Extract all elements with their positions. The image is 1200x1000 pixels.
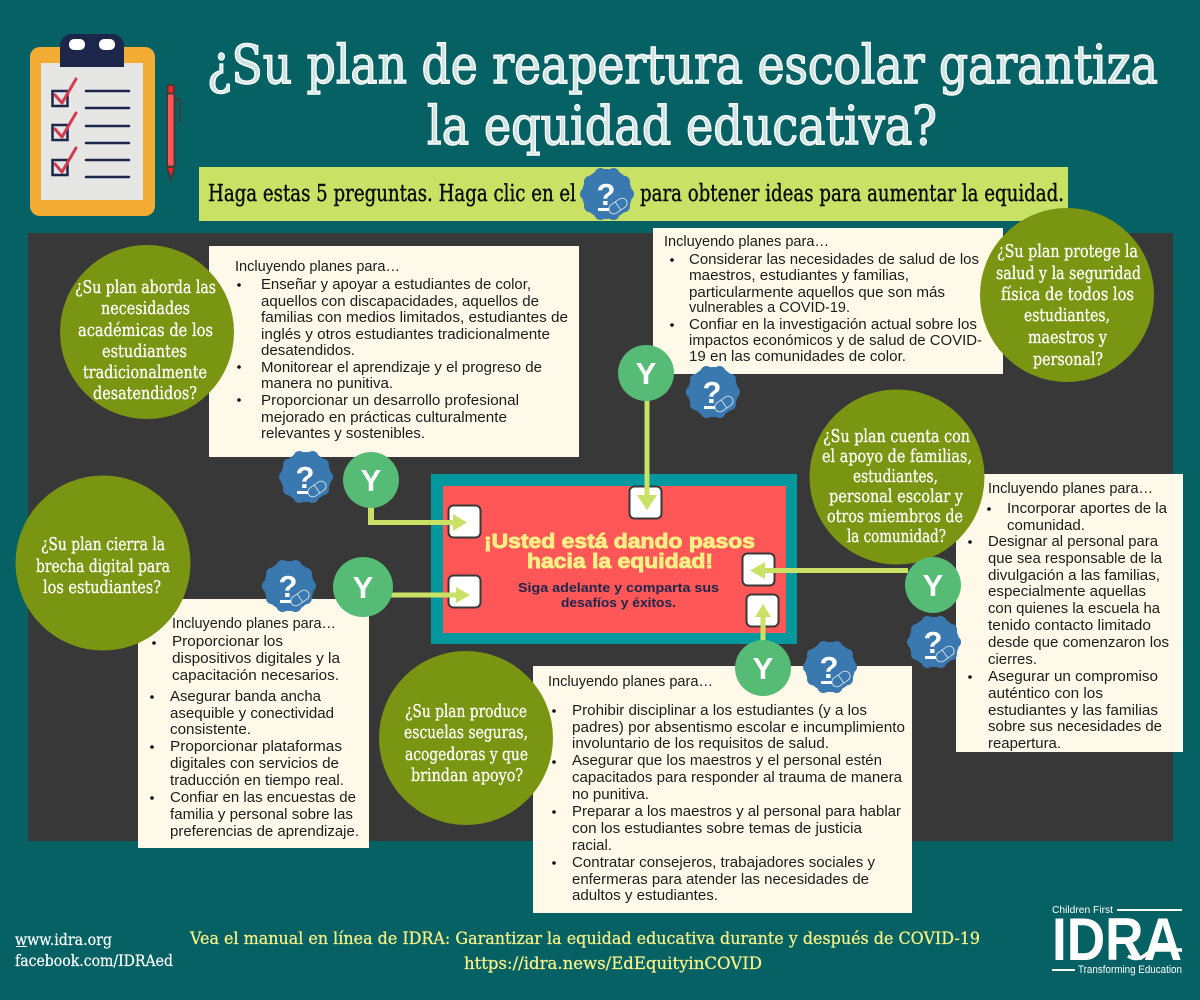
Y marker: community support	[905, 557, 961, 613]
footer links	[15, 931, 173, 970]
bullet: digital devices: dispositivos digitales y la	[172, 651, 341, 667]
badge: health and safety ideas	[686, 366, 740, 418]
badge: digital divide ideas	[262, 560, 316, 612]
bullet: authentic commitment: sobre sus necesidades de	[988, 719, 1162, 735]
Y marker: digital divide	[333, 557, 393, 617]
IDRA logo: Transforming Education	[1078, 964, 1182, 976]
bullet: current research: Confiar en la investigación actual sobre los	[689, 317, 977, 333]
bullet: current research: impactos económicos y de salud de COVID-	[689, 333, 982, 349]
bullet: surveys: familia y personal sobre las	[170, 807, 353, 823]
instruction banner: Haga estas 5 preguntas. Haga clic en el	[208, 181, 576, 207]
badge: safe schools ideas	[803, 641, 857, 693]
central equity box: desafíos y éxitos.	[561, 595, 676, 610]
bullet: health needs	[670, 252, 979, 316]
question circle: digital divide	[16, 476, 190, 650]
bullet: authentic commitment: estudiantes y las familias	[988, 703, 1158, 719]
bullet: broadband: asequible y conectividad	[170, 706, 334, 722]
question circle: community support: la comunidad?	[847, 526, 946, 547]
Y marker: academic needs: Y	[361, 463, 382, 498]
question circle: community support: personal escolar y	[829, 486, 964, 507]
central equity box: hacia la equidad!	[527, 551, 713, 573]
bullet: prohibit discipline: involuntario de los requisitos de salud.	[572, 736, 829, 752]
Y marker: safe schools	[735, 640, 791, 696]
dark background panel	[28, 233, 1173, 841]
bullet: surveys: Confiar en las encuestas de	[170, 790, 356, 806]
Y marker: community support: Y	[923, 568, 944, 603]
bullet: health needs: vulnerables a COVID-19.	[689, 300, 850, 316]
bullet: professional development: relevantes y sostenibles.	[261, 426, 425, 442]
bullet: health needs: Considerar las necesidades de salud de los	[689, 252, 979, 268]
bullet: outreach staff: que sea responsable de la	[988, 551, 1163, 567]
bullet: outreach staff: cierres.	[988, 652, 1037, 668]
bullet: broadband	[150, 689, 334, 738]
arrow: health and safety to center	[637, 395, 657, 510]
bullet: digital platforms	[150, 739, 344, 789]
bullet: surveys: preferencias de aprendizaje.	[170, 824, 359, 840]
bullet: outreach staff: con quienes la escuela ha	[988, 601, 1161, 617]
bullet: support students: inglés y otros estudiantes tradicionalmente	[261, 327, 550, 343]
question circle: community support: otros miembros de	[827, 506, 963, 527]
panel: health and safety plans: Incluyendo planes para…	[664, 234, 829, 250]
instruction banner: ?	[597, 177, 615, 212]
question circle: digital divide: brecha digital para	[36, 556, 170, 577]
central equity box	[431, 474, 797, 644]
Y marker: academic needs	[343, 452, 399, 508]
question circle: academic needs: académicas de los	[78, 320, 213, 341]
badge: academic needs ideas	[279, 451, 333, 503]
question circle: community support: estudiantes,	[853, 466, 938, 487]
bullet: racial justice: con los estudiantes sobre temas de justicia	[572, 821, 863, 837]
question circle: community support: el apoyo de familias,	[822, 446, 972, 467]
bullet: health needs: particularmente aquellos que son más	[689, 285, 945, 301]
bullet: racial justice: Preparar a los maestros y al personal para hablar	[572, 804, 901, 820]
bullet: community input: Incorporar aportes de la	[1007, 501, 1168, 517]
bullet: racial justice: racial.	[572, 838, 612, 854]
checkboxes in central box	[448, 486, 778, 626]
bullet: outreach staff: tenido contacto limitado	[988, 618, 1151, 634]
question circle: academic needs: tradicionalmente	[83, 362, 207, 383]
bullet: professional development: Proporcionar un desarrollo profesional	[261, 393, 519, 409]
question circle: health and safety	[980, 208, 1154, 382]
footer manual reference: https://idra.news/EdEquityinCOVID	[464, 954, 762, 974]
question circle: academic needs: estudiantes	[102, 341, 187, 362]
Y marker: health and safety: Y	[636, 356, 657, 391]
panel: academic needs plans: Incluyendo planes para…	[235, 259, 400, 275]
bullet: hire counselors: enfermeras para atender las necesidades de	[572, 872, 869, 888]
central equity box: Siga adelante y comparta sus	[518, 580, 719, 595]
panel: digital divide plans: Incluyendo planes para…	[172, 616, 336, 632]
bullet: professional development: mejorado en prácticas culturalmente	[261, 410, 507, 426]
footer links: www.idra.org	[15, 931, 112, 949]
bullet: authentic commitment: reapertura.	[988, 736, 1061, 752]
icon: pen	[166, 85, 180, 183]
bullet: health needs: maestros, estudiantes y familias,	[689, 268, 909, 284]
bullet: hire counselors: adultos y estudiantes.	[572, 888, 718, 904]
bullet: prohibit discipline: padres) por absentismo escolar e incumplimiento	[572, 720, 905, 736]
bullet: support students: desatendidos.	[261, 343, 355, 359]
arrow: academic needs to center	[368, 500, 467, 531]
badge: academic needs ideas: ?	[296, 460, 314, 495]
arrow: digital divide to center	[385, 587, 470, 603]
instruction banner	[199, 167, 1068, 221]
question circle: academic needs: desatendidos?	[93, 383, 197, 404]
bullet: racial justice	[552, 804, 901, 854]
bullet: digital devices: Proporcionar los	[172, 634, 283, 650]
bullet: digital devices: capacitación necesarios.	[172, 668, 339, 684]
badge: digital divide ideas: ?	[279, 569, 297, 604]
question circle: health and safety: estudiantes,	[1024, 305, 1110, 326]
bullet: digital devices	[152, 634, 341, 684]
bullet: monitor learning	[237, 360, 542, 392]
arrow: safe schools to center	[755, 604, 771, 645]
title: la equidad educativa?	[427, 96, 937, 157]
footer links: facebook.com/IDRAed	[15, 952, 173, 970]
bullet: trauma training: capacitados para responder al trauma de manera	[572, 770, 903, 786]
question circle: community support: ¿Su plan cuenta con	[823, 426, 970, 447]
bullet: digital platforms: Proporcionar plataformas	[170, 739, 342, 755]
question circle: digital divide: los estudiantes?	[43, 577, 161, 598]
instruction banner: para obtener ideas para aumentar la equidad.	[640, 181, 1064, 207]
bullet: support students: familias con medios limitados, estudiantes de	[261, 310, 568, 326]
footer manual reference: Vea el manual en línea de IDRA: Garantizar la equidad educativa durante y después de COVID-19	[189, 929, 980, 949]
bullet: monitor learning: manera no punitiva.	[261, 376, 393, 392]
question circle: safe schools: acogedoras y que	[405, 744, 528, 765]
arrow: community support to center	[750, 562, 908, 579]
question circle: community support	[810, 390, 984, 564]
bullet: broadband: Asegurar banda ancha	[170, 689, 322, 705]
bullet: trauma training: Asegurar que los maestros y el personal estén	[572, 753, 882, 769]
bullet: outreach staff: divulgación a las familias,	[988, 568, 1160, 584]
bullet: surveys	[150, 790, 359, 840]
bullet: prohibit discipline	[552, 703, 905, 752]
bullet: support students: aquellos con discapacidades, aquellos de	[261, 294, 539, 310]
badge: community support ideas: ?	[924, 625, 942, 660]
Y marker: digital divide: Y	[353, 570, 374, 605]
bullet: support students: Enseñar y apoyar a estudiantes de color,	[261, 277, 531, 293]
bullet: hire counselors: Contratar consejeros, trabajadores sociales y	[572, 855, 876, 871]
bullet: current research: 19 en las comunidades de color.	[689, 349, 906, 365]
bullet: authentic commitment: Asegurar un compromiso	[988, 669, 1158, 685]
panel: community support plans: Incluyendo planes para…	[988, 481, 1153, 497]
panel: community support plans	[956, 474, 1183, 752]
question circle: health and safety: física de todos los	[1001, 284, 1134, 305]
bullet: trauma training	[552, 753, 903, 803]
question circle: health and safety: maestros y	[1028, 327, 1108, 348]
bullet: outreach staff: Designar al personal para	[988, 534, 1159, 550]
badge: safe schools ideas: ?	[820, 650, 838, 685]
central equity box: ¡Usted está dando pasos	[484, 531, 755, 553]
bullet: support students	[237, 277, 568, 359]
footer manual reference	[189, 929, 980, 974]
bullet: outreach staff: especialmente aquellas	[988, 584, 1146, 600]
bullet: authentic commitment	[968, 669, 1162, 752]
IDRA logo: IDRA	[1052, 906, 1182, 973]
bullet: outreach staff: desde que comenzaron los	[988, 635, 1169, 651]
panel: safe schools plans: Incluyendo planes para…	[548, 674, 713, 690]
icon: clipboard checklist	[30, 34, 155, 216]
IDRA logo: Children First	[1052, 904, 1113, 916]
bullet: digital platforms: traducción en tiempo real.	[170, 773, 344, 789]
bullet: prohibit discipline: Prohibir disciplinar a los estudiantes (y a los	[572, 703, 867, 719]
bullet: community input: comunidad.	[1007, 518, 1085, 534]
question circle: health and safety: salud y la seguridad	[996, 263, 1141, 284]
bullet: professional development	[237, 393, 519, 442]
panel: health and safety plans	[653, 228, 1003, 374]
panel: academic needs plans	[209, 246, 579, 457]
bullet: community input	[987, 501, 1168, 534]
bullet: digital platforms: digitales con servicios de	[170, 756, 339, 772]
bullet: broadband: consistente.	[170, 722, 251, 738]
bullet: outreach staff	[968, 534, 1169, 668]
bullet: current research	[670, 317, 982, 365]
question circle: academic needs: ¿Su plan aborda las	[75, 277, 216, 298]
question circle: health and safety: ¿Su plan protege la	[997, 241, 1138, 262]
Y marker: safe schools: Y	[753, 651, 774, 686]
bullet: hire counselors	[552, 855, 876, 904]
bullet: authentic commitment: auténtico con los	[988, 686, 1103, 702]
Y marker: health and safety	[618, 345, 674, 401]
question circle: academic needs	[60, 245, 234, 419]
bullet: trauma training: no punitiva.	[572, 787, 649, 803]
panel: digital divide plans	[138, 599, 369, 848]
badge: community support ideas	[907, 616, 961, 668]
panel: safe schools plans	[533, 666, 912, 913]
question circle: digital divide: ¿Su plan cierra la	[41, 534, 165, 555]
question circle: safe schools: brindan apoyo?	[411, 765, 523, 786]
question circle: safe schools	[379, 651, 553, 825]
title	[207, 35, 1158, 157]
question circle: academic needs: necesidades	[101, 298, 190, 319]
badge: health and safety ideas: ?	[703, 375, 721, 410]
question circle: safe schools: ¿Su plan produce	[405, 701, 527, 722]
question circle: safe schools: escuelas seguras,	[404, 722, 528, 743]
bullet: monitor learning: Monitorear el aprendizaje y el progreso de	[261, 360, 542, 376]
question circle: health and safety: personal?	[1033, 349, 1103, 370]
